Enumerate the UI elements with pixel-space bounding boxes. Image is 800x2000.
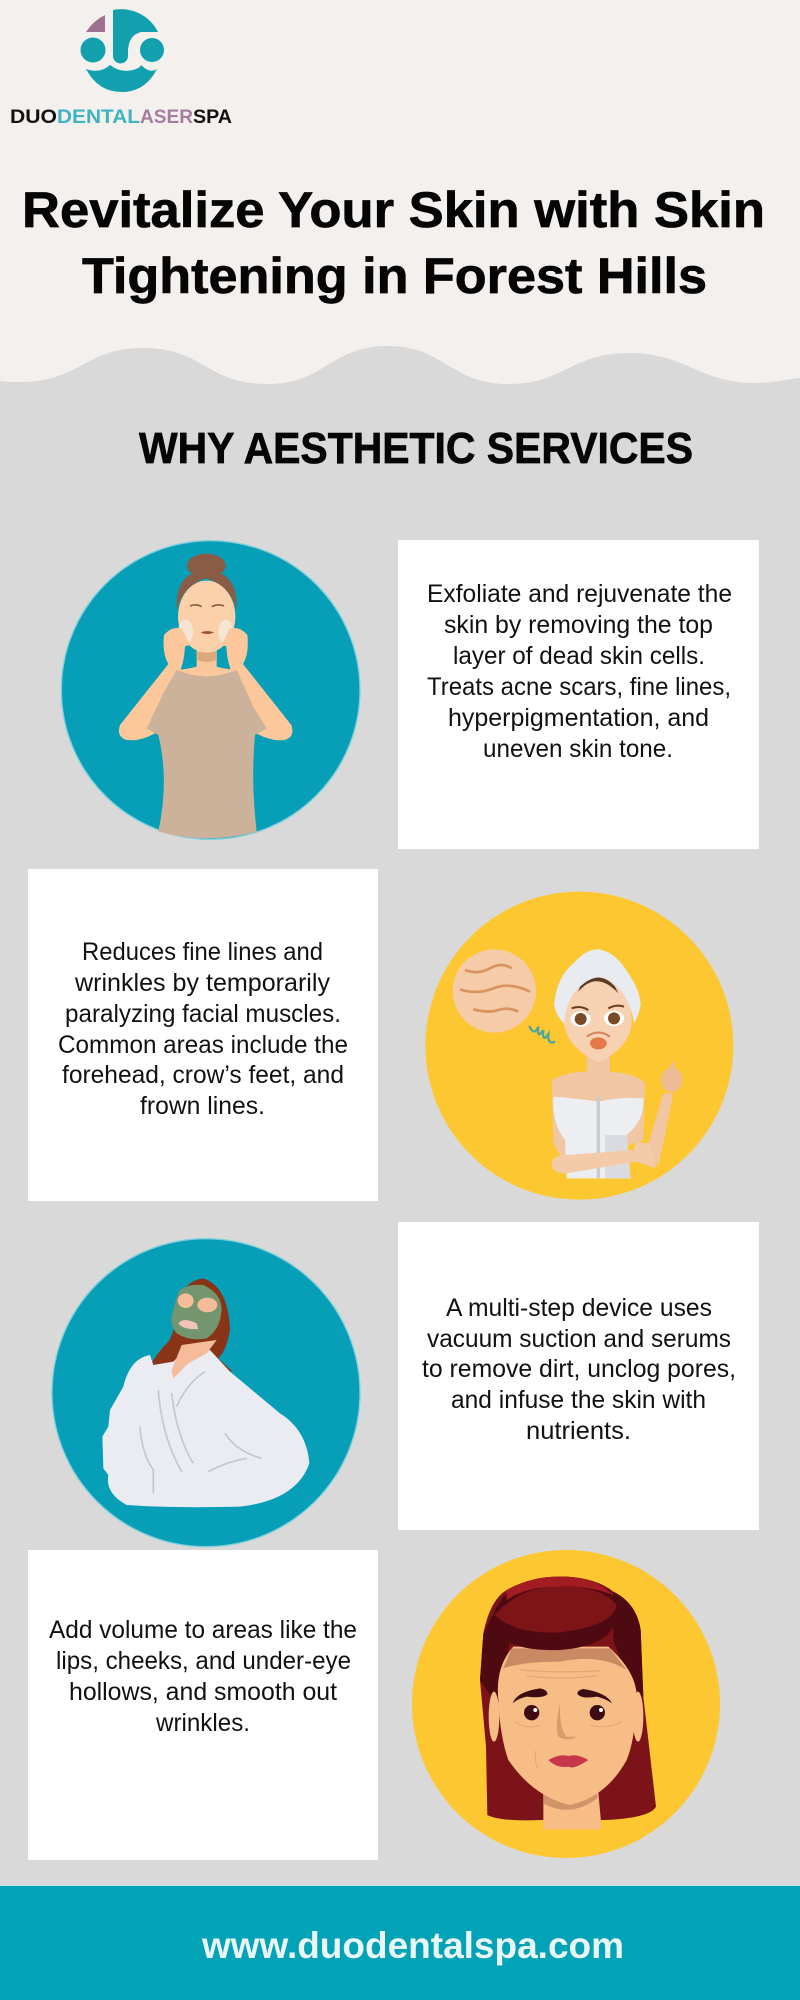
panel: exfoliate text card: layer of dead skin cells. [453, 642, 705, 670]
panel: wrinkle reduction text card: wrinkles by temporarily [74, 969, 330, 997]
panel: exfoliate text card: Exfoliate and rejuvenate the [427, 580, 732, 608]
footer band with website [0, 1885, 800, 2000]
panel: exfoliate text card: hyperpigmentation, and [448, 704, 709, 732]
header wave background [0, 0, 800, 384]
panel: device facial text card: to remove dirt, unclog pores, [422, 1355, 736, 1383]
logo: SPA [193, 107, 232, 128]
logo [10, 9, 232, 128]
title: Tightening in Forest Hills [82, 248, 707, 304]
footer band with website: www.duodentalspa.com [201, 1925, 624, 1966]
panel: device facial text card [398, 1222, 759, 1530]
panel: device facial text card: A multi-step device uses [446, 1294, 712, 1322]
logo: DENTAL [57, 107, 140, 128]
panel: fillers text card: Add volume to areas like the [49, 1616, 357, 1644]
logo: ASER [140, 107, 193, 128]
panel: fillers text card: wrinkles. [155, 1709, 250, 1737]
illustration: woman cleansing face on teal circle [61, 541, 360, 839]
panel: wrinkle reduction text card: forehead, crow’s feet, and [62, 1061, 344, 1089]
panel: wrinkle reduction text card: Common areas include the [58, 1031, 348, 1059]
title [22, 182, 765, 304]
panel: exfoliate text card: uneven skin tone. [483, 735, 673, 763]
illustration: mature woman's face on yellow circle [412, 1550, 720, 1858]
panel: wrinkle reduction text card: paralyzing facial muscles. [65, 1000, 341, 1028]
panel: exfoliate text card: Treats acne scars, fine lines, [427, 673, 731, 701]
panel: fillers text card: hollows, and smooth out [69, 1678, 337, 1706]
panel: device facial text card: nutrients. [526, 1417, 631, 1445]
panel: exfoliate text card: skin by removing the top [444, 611, 713, 639]
panel: fillers text card [28, 1550, 378, 1860]
panel: wrinkle reduction text card: frown lines. [140, 1092, 265, 1120]
heading: why aesthetic services: WHY AESTHETIC SERVICES [139, 424, 693, 473]
panel: wrinkle reduction text card: Reduces fine lines and [82, 938, 323, 966]
illustration: worried woman in towel on yellow circle [425, 892, 733, 1200]
panel: exfoliate text card [398, 540, 759, 849]
illustration: woman with green face mask on teal circle [52, 1239, 360, 1547]
panel: wrinkle reduction text card [28, 869, 378, 1201]
panel: device facial text card: and infuse the skin with [451, 1386, 706, 1414]
logo: DUO [10, 107, 57, 128]
title: Revitalize Your Skin with Skin [22, 182, 765, 238]
panel: device facial text card: vacuum suction and serums [427, 1325, 731, 1353]
panel: fillers text card: lips, cheeks, and under-eye [56, 1647, 351, 1675]
